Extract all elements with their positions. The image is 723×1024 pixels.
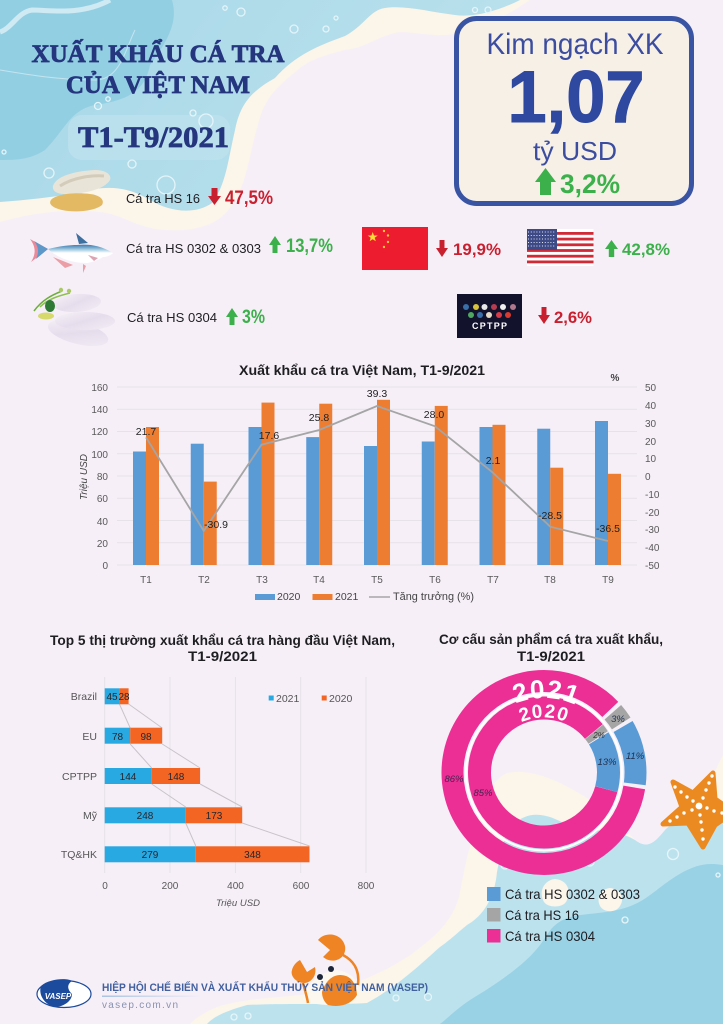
month labels: T7 bbox=[487, 575, 499, 586]
chart legend: 2020 bbox=[329, 693, 353, 705]
product: HS 16 bbox=[126, 188, 273, 209]
month labels: T1 bbox=[140, 575, 152, 586]
bar value labels: 248 bbox=[137, 811, 154, 822]
icon: VASEP logo: VASEP bbox=[45, 992, 72, 1001]
chart title: Cơ cấu sản phẩm cá tra xuất khẩu, bbox=[439, 631, 663, 647]
growth data labels: -30.9 bbox=[204, 519, 228, 531]
left axis labels: 140 bbox=[91, 405, 108, 416]
growth data labels: 28.0 bbox=[424, 409, 444, 421]
chart legend bbox=[269, 693, 353, 705]
bar value labels: 279 bbox=[142, 850, 159, 861]
product: HS 0302 and 0303 bbox=[126, 236, 333, 257]
chart legend: 2020 bbox=[277, 591, 301, 603]
chart title bbox=[50, 632, 395, 664]
market labels: Mỹ bbox=[83, 810, 98, 822]
month labels: T2 bbox=[198, 575, 210, 586]
chart title: T1-9/2021 bbox=[188, 648, 257, 664]
website: vasep.com.vn bbox=[102, 1000, 178, 1011]
month labels: T9 bbox=[602, 575, 614, 586]
value axis labels: 400 bbox=[227, 881, 244, 892]
donut percentage labels bbox=[444, 714, 645, 799]
right axis labels: -30 bbox=[645, 525, 660, 536]
outer ring 2021 bbox=[415, 643, 673, 902]
chart title: Xuất khẩu cá tra Việt Nam, T1-9/2021 bbox=[239, 362, 485, 378]
market labels bbox=[61, 691, 98, 861]
value axis labels bbox=[102, 881, 375, 892]
right axis labels: 30 bbox=[645, 419, 657, 430]
bar value labels: 98 bbox=[140, 732, 152, 743]
bar value labels: 348 bbox=[244, 850, 261, 861]
growth data labels bbox=[136, 388, 620, 535]
market: United States bbox=[527, 229, 670, 266]
left axis labels: 80 bbox=[97, 472, 108, 483]
product: HS 0304 bbox=[127, 307, 265, 328]
month labels: T5 bbox=[371, 575, 383, 586]
product: HS 0304: Cá tra HS 0304 bbox=[127, 310, 217, 325]
left axis labels: 120 bbox=[91, 427, 108, 438]
month labels bbox=[140, 575, 614, 586]
inner ring 2020 bbox=[453, 682, 635, 863]
icon: HS 16 fillets bbox=[50, 170, 110, 211]
value axis labels: 800 bbox=[358, 881, 375, 892]
month labels: T6 bbox=[429, 575, 441, 586]
bars 2021 bbox=[146, 400, 621, 565]
chart legend: 2021 bbox=[276, 693, 300, 705]
icon: shell right bbox=[598, 888, 622, 911]
month labels: T8 bbox=[544, 575, 556, 586]
organisation name: HIỆP HỘI CHẾ BIẾN VÀ XUẤT KHẨU THỦY SẢN VIỆT NAM (VASEP) bbox=[102, 981, 428, 994]
chart title: T1-9/2021 bbox=[517, 648, 585, 664]
period heading: T1-T9/2021 bbox=[78, 121, 229, 154]
donut legend: Cá tra HS 0304 bbox=[505, 928, 595, 944]
growth line bbox=[146, 406, 608, 541]
product: HS 16: 47,5% bbox=[225, 188, 273, 209]
growth data labels: 25.8 bbox=[309, 412, 329, 424]
left axis title: Triệu USD bbox=[79, 454, 90, 500]
market labels: CPTPP bbox=[62, 771, 97, 783]
background: bottom-right sea and beach bbox=[190, 755, 723, 1024]
chart title bbox=[439, 631, 663, 664]
chart: monthly exports combo chart bbox=[79, 362, 660, 603]
icon: VASEP logo bbox=[37, 979, 91, 1008]
bar value labels bbox=[106, 692, 261, 861]
donut percentage labels: 3% bbox=[611, 714, 625, 725]
axis title: Triệu USD bbox=[216, 898, 260, 909]
market: CPTPP bbox=[457, 294, 592, 338]
product: HS 16: Cá tra HS 16 bbox=[126, 191, 200, 206]
donut percentage labels: 86% bbox=[444, 774, 464, 785]
bar value labels: 173 bbox=[206, 811, 223, 822]
ring year 2020: 2020 bbox=[519, 704, 568, 722]
market labels: TQ&HK bbox=[61, 849, 97, 861]
donut percentage labels: 2% bbox=[592, 731, 605, 740]
right axis labels: -50 bbox=[645, 561, 660, 572]
turnover label: Kim ngạch XK bbox=[486, 28, 664, 61]
icon: crab bbox=[292, 934, 358, 1006]
bar value labels: 144 bbox=[120, 772, 137, 783]
right axis labels: -40 bbox=[645, 543, 660, 554]
market: CPTPP: 2,6% bbox=[554, 308, 592, 327]
icon: whole pangasius fish bbox=[30, 233, 113, 273]
left axis labels: 0 bbox=[102, 561, 108, 572]
chart: product structure donut bbox=[439, 631, 663, 875]
right axis labels: 10 bbox=[645, 454, 657, 465]
title: CỦA VIỆT NAM bbox=[66, 70, 250, 99]
icon: shell left bbox=[542, 879, 569, 906]
market: United States: 42,8% bbox=[622, 240, 670, 259]
left axis labels: 100 bbox=[91, 450, 108, 461]
left axis labels: 60 bbox=[97, 494, 108, 505]
right axis labels: -10 bbox=[645, 490, 660, 501]
left axis labels: 20 bbox=[97, 539, 108, 550]
icon: China flag bbox=[362, 227, 428, 270]
panel: export turnover bbox=[456, 18, 692, 204]
bar value labels: 28 bbox=[118, 692, 130, 703]
right axis unit: % bbox=[611, 373, 620, 384]
growth value: 3,2% bbox=[560, 169, 620, 199]
month labels: T4 bbox=[313, 575, 325, 586]
product: HS 0304: 3% bbox=[242, 307, 265, 328]
market labels: Brazil bbox=[71, 691, 97, 703]
chart legend bbox=[255, 591, 474, 603]
right axis labels: 20 bbox=[645, 437, 657, 448]
icon: CPTPP badge: CPTPP bbox=[472, 321, 507, 331]
growth data labels: -36.5 bbox=[596, 523, 620, 535]
right axis labels: 50 bbox=[645, 383, 657, 394]
right axis labels: -20 bbox=[645, 508, 660, 519]
chart title: Top 5 thị trường xuất khẩu cá tra hàng đầu Việt Nam, bbox=[50, 632, 395, 648]
donut percentage labels: 13% bbox=[597, 757, 617, 768]
right axis labels bbox=[645, 383, 660, 572]
growth data labels: 17.6 bbox=[259, 430, 279, 442]
donut legend: Cá tra HS 0302 & 0303 bbox=[505, 886, 640, 902]
icon: US flag bbox=[527, 229, 594, 266]
icon: starfish bbox=[663, 773, 723, 847]
chart legend: Tăng trưởng (%) bbox=[393, 591, 474, 603]
value axis labels: 0 bbox=[102, 881, 108, 892]
donut legend bbox=[487, 886, 640, 944]
bars 2020 bbox=[119, 688, 310, 862]
left axis labels bbox=[91, 383, 108, 572]
growth data labels: -28.5 bbox=[538, 510, 562, 522]
ring year 2021: 2021 bbox=[512, 680, 576, 704]
bar value labels: 78 bbox=[112, 732, 123, 743]
turnover unit: tỷ USD bbox=[533, 136, 617, 166]
series connector lines bbox=[119, 704, 310, 846]
growth data labels: 2.1 bbox=[486, 455, 500, 467]
icon: up arrow bbox=[535, 168, 556, 195]
bars 2020 bbox=[133, 421, 608, 565]
market: China bbox=[362, 227, 501, 270]
right axis labels: 0 bbox=[645, 472, 651, 483]
value axis labels: 200 bbox=[162, 881, 179, 892]
left axis labels: 160 bbox=[91, 383, 108, 394]
market labels: EU bbox=[82, 731, 97, 743]
right axis labels: 40 bbox=[645, 401, 657, 412]
bar value labels: 45 bbox=[106, 692, 118, 703]
product: HS 0302 and 0303: 13,7% bbox=[286, 236, 333, 257]
donut legend: Cá tra HS 16 bbox=[505, 907, 579, 923]
title bbox=[32, 39, 285, 99]
product: HS 0302 and 0303: Cá tra HS 0302 & 0303 bbox=[126, 241, 261, 256]
value axis labels: 600 bbox=[293, 881, 310, 892]
bar value labels: 148 bbox=[168, 772, 185, 783]
background: top-left sea and beach bbox=[0, 0, 530, 230]
title: XUẤT KHẨU CÁ TRA bbox=[32, 39, 285, 68]
turnover value: 1,07 bbox=[508, 57, 644, 138]
chart: top 5 export markets bbox=[50, 632, 395, 909]
donut percentage labels: 11% bbox=[626, 751, 645, 762]
market: China: 19,9% bbox=[453, 240, 501, 259]
growth data labels: 39.3 bbox=[367, 388, 387, 400]
growth data labels: 21.7 bbox=[136, 426, 156, 438]
chart legend: 2021 bbox=[335, 591, 359, 603]
icon: HS 0304 fillets with herbs bbox=[34, 288, 115, 351]
footer bbox=[37, 979, 428, 1011]
donut percentage labels: 85% bbox=[473, 788, 493, 799]
ring separator bbox=[466, 694, 622, 850]
left axis labels: 40 bbox=[97, 517, 108, 528]
bars 2021 bbox=[105, 688, 196, 862]
month labels: T3 bbox=[256, 575, 268, 586]
